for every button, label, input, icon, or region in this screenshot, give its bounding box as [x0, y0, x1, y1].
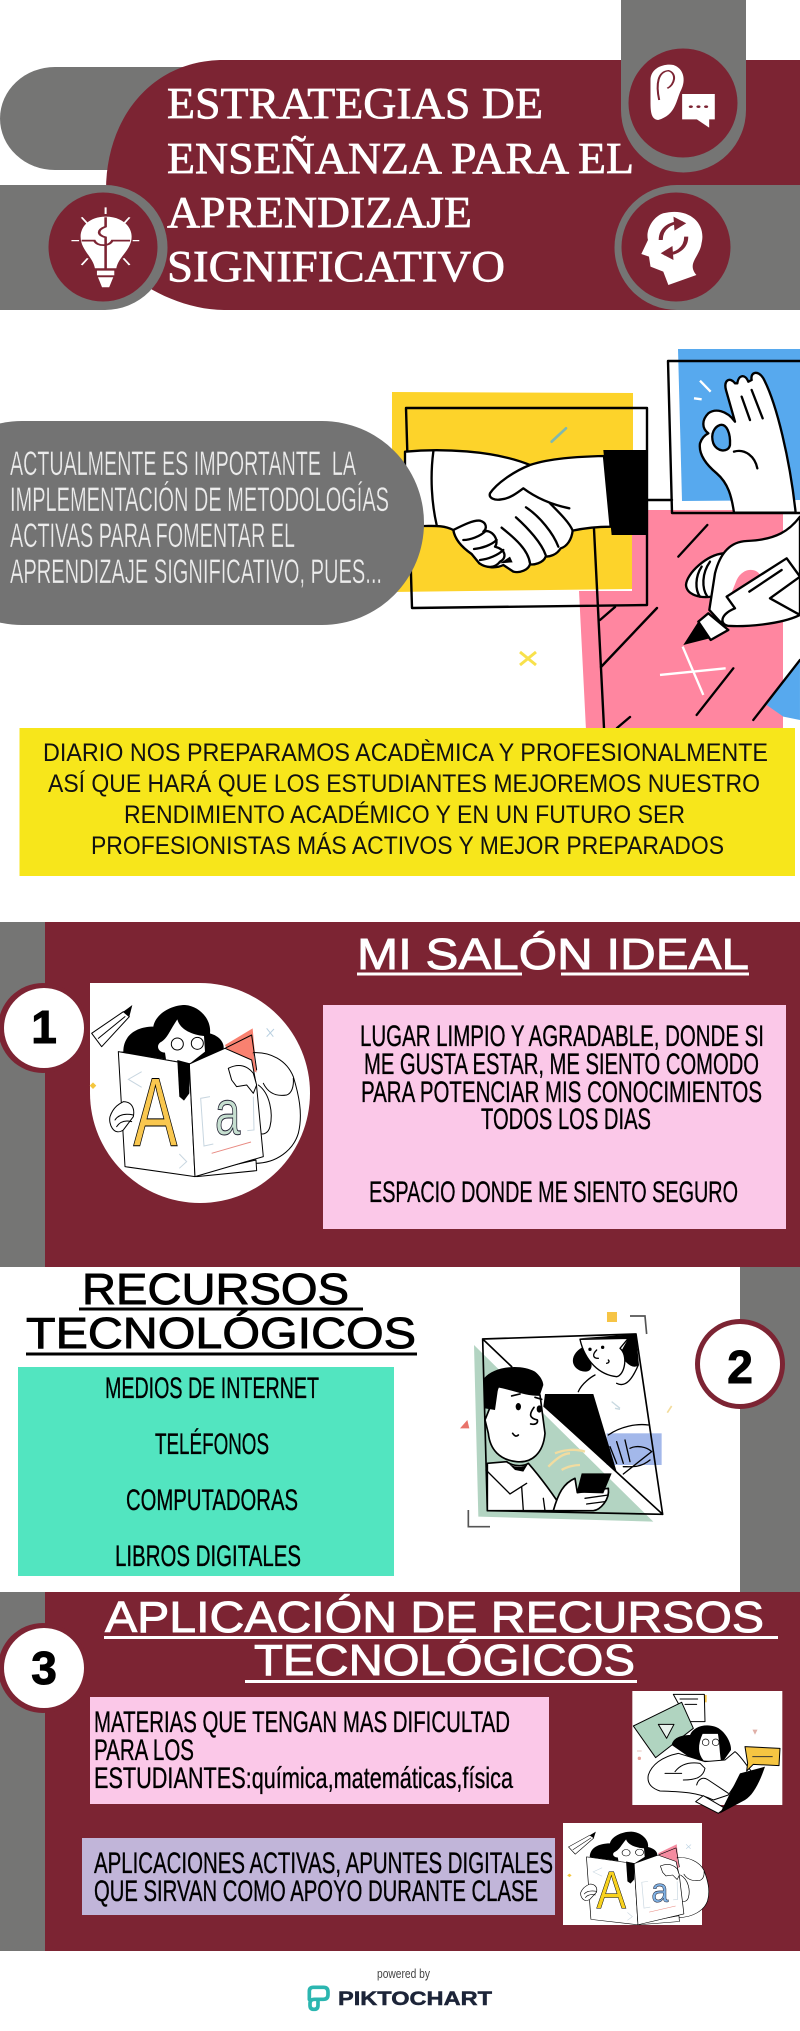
title: ENSEÑANZA PARA EL [167, 134, 634, 183]
heading: recursos tecnologicos: RECURSOS [82, 1265, 349, 1314]
number badge 1: 1 [31, 1001, 57, 1053]
number badge 3 [0, 1623, 88, 1713]
number badge 1 [0, 983, 88, 1073]
intro text [10, 445, 389, 591]
heading: recursos tecnologicos: TECNOLÓGICOS [26, 1309, 416, 1358]
title: ESTRATEGIAS DE [167, 79, 543, 128]
footer: powered by piktochart: PIKTOCHART [338, 1989, 492, 2010]
footer: powered by piktochart [309, 1967, 492, 2010]
heading: mi salon ideal: MI SALÓN IDEAL [357, 930, 749, 979]
green list box: TELÉFONOS [155, 1428, 269, 1461]
panel: aplicacion de recursos tecnologicos [0, 1592, 800, 1951]
pink box: materias: MATERIAS QUE TENGAN MAS DIFICULTAD [94, 1706, 510, 1739]
illustration: reading girl [90, 983, 310, 1203]
title: SIGNIFICATIVO [167, 242, 505, 291]
purple box: aplicaciones [82, 1838, 555, 1915]
pink panel [579, 510, 783, 730]
black frames [406, 361, 800, 728]
panel: header [0, 0, 800, 310]
pink text box: TODOS LOS DIAS [481, 1103, 651, 1136]
illustration: woman with laptop [632, 1691, 782, 1813]
heading: aplicacion de recursos tecnologicos [104, 1593, 778, 1685]
green list box [18, 1367, 394, 1576]
grey bottom right band [615, 185, 800, 310]
yellow text box: ASÍ QUE HARÁ QUE LOS ESTUDIANTES MEJOREMOS NUESTRO [48, 769, 760, 798]
intro grey pill [0, 421, 424, 625]
ok hand [694, 373, 796, 513]
intro text: APRENDIZAJE SIGNIFICATIVO, PUES... [10, 553, 382, 591]
title: APRENDIZAJE [167, 188, 472, 237]
purple box: aplicaciones: APLICACIONES ACTIVAS, APUNTES DIGITALES [94, 1847, 553, 1880]
pink box: materias: PARA LOS [94, 1734, 194, 1767]
icon: head with arrows [622, 192, 730, 302]
heading: aplicacion de recursos tecnologicos: TECNOLÓGICOS [254, 1636, 635, 1685]
yellow text box: PROFESIONISTAS MÁS ACTIVOS Y MEJOR PREPARADOS [91, 831, 724, 860]
panel: mi salon ideal [0, 922, 800, 1267]
panel: recursos tecnologicos [18, 1265, 800, 1592]
blue panel [678, 349, 800, 501]
grey top right tab [621, 0, 746, 173]
icon: yellow x [520, 652, 536, 665]
green list box: COMPUTADORAS [126, 1484, 298, 1517]
illustration: collage of hands [392, 349, 800, 730]
grey pill behind header [0, 67, 260, 170]
yellow square [392, 392, 633, 592]
icon: piktochart logo [309, 1987, 328, 2009]
maroon header shape [106, 60, 800, 310]
yellow text box: RENDIMIENTO ACADÉMICO Y EN UN FUTURO SER [124, 800, 685, 829]
yellow text box: DIARIO NOS PREPARAMOS ACADÈMICA Y PROFESIONALMENTE [43, 738, 768, 767]
heading: recursos tecnologicos [26, 1265, 417, 1358]
icon: puzzle light bulb [48, 192, 158, 302]
grey bottom left band [0, 185, 168, 310]
purple box: aplicaciones: QUE SIRVAN COMO APOYO DURANTE CLASE [94, 1875, 538, 1908]
intro text: ACTIVAS PARA FOMENTAR EL [10, 517, 295, 555]
handshake [405, 428, 647, 572]
pink box: materias [90, 1697, 549, 1804]
icon: ear and speech bubble [628, 48, 738, 158]
hand with pencil [660, 515, 800, 720]
number badge 2: 2 [727, 1341, 753, 1393]
yellow text box [20, 728, 795, 876]
heading: aplicacion de recursos tecnologicos: APLICACIÓN DE RECURSOS [105, 1593, 764, 1642]
illustration: small reading girl [563, 1823, 709, 1925]
number badge 3: 3 [31, 1642, 57, 1694]
pink text box [323, 1005, 786, 1229]
footer: powered by piktochart: powered by [377, 1967, 431, 1981]
green list box: MEDIOS DE INTERNET [105, 1372, 319, 1405]
green list box: LIBROS DIGITALES [115, 1540, 301, 1573]
illustration: man with phone and woman [460, 1312, 672, 1527]
title [167, 79, 634, 291]
number badge 2 [695, 1319, 785, 1409]
pink box: materias: ESTUDIANTES:química,matemáticas,física [94, 1762, 513, 1795]
intro text: IMPLEMENTACIÓN DE METODOLOGÍAS [10, 481, 389, 519]
intro text: ACTUALMENTE ES IMPORTANTE LA [10, 445, 356, 483]
